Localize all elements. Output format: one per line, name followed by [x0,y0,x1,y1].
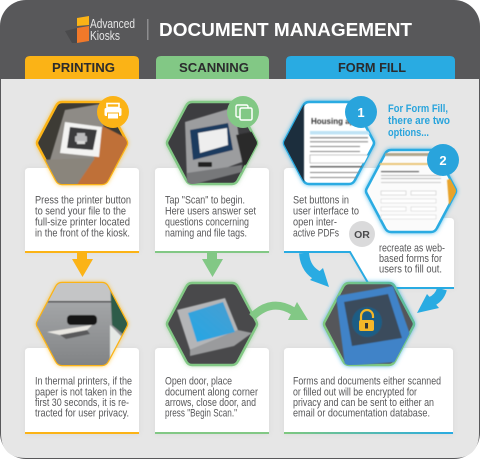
panel: form fill options [280,96,459,288]
text card: thermal printers: first 30 seconds, it is re- [35,397,129,409]
panel: printing step 2 [25,280,139,434]
text card: tap scan: Tap "Scan" to begin. [165,194,245,206]
badge: OR: OR [354,229,370,241]
arrow: printing down [72,253,93,277]
text card: thermal printers: In thermal printers, if the [35,376,132,388]
photo hexagon: thermal printer [30,280,130,370]
text card: thermal printers [25,348,139,434]
photo hexagon: kiosk printer button [37,102,130,186]
panel: scanning step 2 [155,283,269,434]
arrow: scanning down [202,253,223,277]
logo: Advanced Kiosks [65,16,135,43]
text card: forms and documents [284,348,453,434]
header divider [147,19,148,40]
text card: press the printer button: in the front of the kiosk. [35,228,130,240]
text card: form fill options: active PDFs [293,228,339,240]
panel: scanning step 1 [155,96,269,253]
badge: number 1 [345,96,377,128]
title: DOCUMENT MANAGEMENT [159,20,412,40]
text card: open door: arrows, close door, and [165,397,256,409]
icon: printer badge [97,96,129,128]
text card: tap scan: Here users answer set [165,206,256,218]
panel: encryption result [284,283,453,434]
text card: open door: document along corner [165,386,258,398]
badge: number 2: 2 [439,153,447,168]
tab: scanning [156,56,269,80]
photo hexagon: web form [365,150,457,232]
text card: tap scan [155,168,269,253]
photo hexagon: encrypted folder with lock [324,283,414,366]
callout: two options: there are two [388,115,450,127]
text card: open door: press "Begin Scan." [165,408,237,420]
text card: forms and documents: privacy and can be sent to either an [293,397,434,409]
text card: form fill options: based forms for [379,253,442,265]
text card: forms and documents: email or documentation database. [293,408,430,420]
panel: printing step 1 [25,96,139,253]
logo: Advanced Kiosks: Kiosks [90,28,120,43]
icon: padlock [359,310,374,331]
text card: tap scan: questions concerning [165,216,249,228]
text card: press the printer button: Press the printer button [35,194,131,206]
badge: number 2 [427,144,459,176]
badge: number 1: 1 [357,105,365,120]
text card: open door [155,348,269,434]
photo hexagon: kiosk scan screen [167,102,260,186]
text card: thermal printers: paper is not taken in the [35,386,132,398]
photo hexagon: interactive PDF [280,100,388,190]
tab: form fill [286,56,455,80]
text card: forms and documents: or filled out will be encrypted for [293,386,417,398]
text card: open door: Open door, place [165,376,232,388]
text card: press the printer button: full-size printer located [35,216,130,228]
text card: form fill options [284,168,454,288]
text card: forms and documents: Forms and documents either scanned [293,376,441,388]
arrow: scanning to encryption [252,302,308,320]
tab: printing [25,56,139,80]
arrow: option 2 to encryption [417,289,442,313]
text card: thermal printers: tracted for user privacy. [35,408,129,420]
tab: scanning: SCANNING [179,60,249,75]
icon: scan pages badge [227,96,259,128]
callout: two options: For Form Fill, [388,103,448,115]
photo hexagon: scanner door [167,283,257,365]
arrow: option 1 to encryption [304,253,329,287]
text card: form fill options: open inter- [293,216,337,228]
text card: form fill options: Set buttons in [293,194,349,206]
text card: tap scan: naming and file tags. [165,228,247,240]
photo hexagon: interactive PDF: Housing application [311,117,388,126]
callout: two options: options... [388,127,429,139]
text card: press the printer button: to send your file to the [35,206,126,218]
text card: press the printer button [25,168,139,253]
text card: form fill options: recreate as web- [379,242,445,254]
tab: form fill: FORM FILL [338,60,406,75]
text card: form fill options: user interface to [293,206,359,218]
callout: two options [388,103,450,139]
badge: OR [349,221,375,247]
text card: form fill options: users to fill out. [379,264,442,276]
logo: Advanced Kiosks: Advanced [90,16,135,31]
tab: printing: PRINTING [52,60,115,75]
